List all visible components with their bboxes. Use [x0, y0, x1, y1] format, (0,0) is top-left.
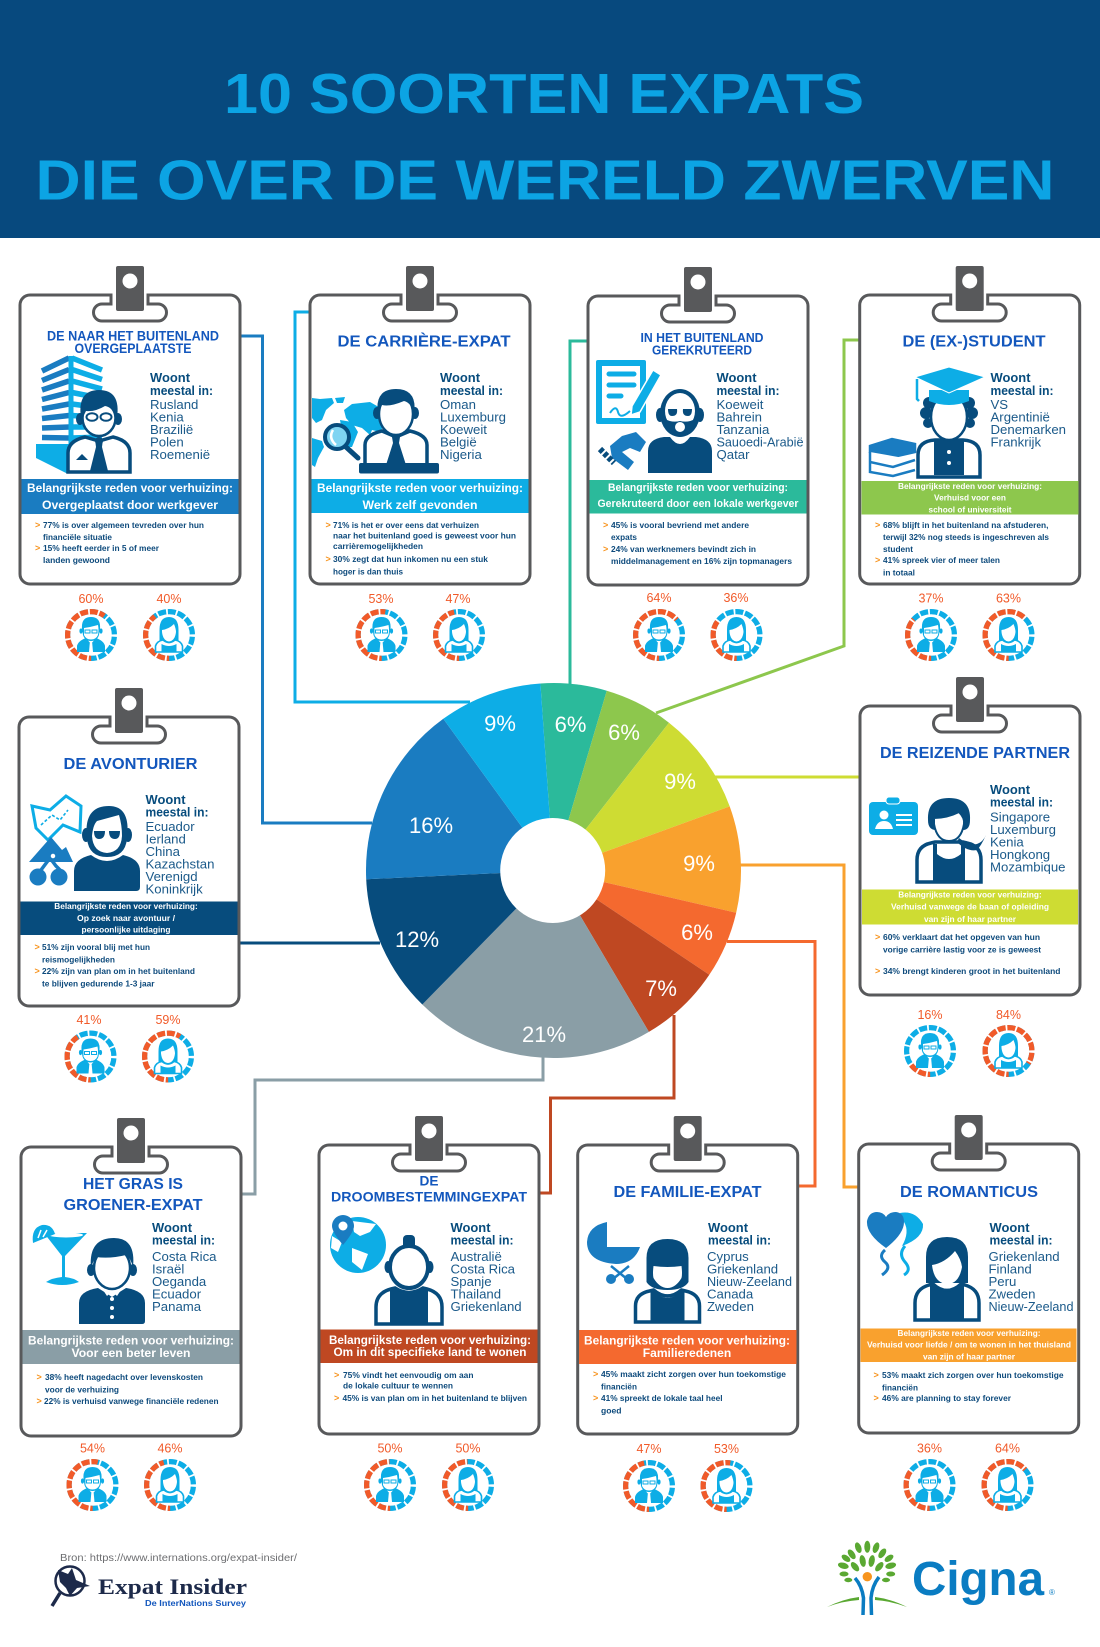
pie chart: 9%: [664, 769, 696, 794]
reason band: Belangrijkste reden voor verhuizing:: [28, 1334, 234, 1348]
woont meestal in: [716, 370, 804, 462]
woont meestal in: Qatar: [716, 447, 750, 462]
bullets: 51% zijn vooral blij met hun: [42, 943, 150, 952]
woont meestal in: Koeweit: [440, 422, 487, 437]
woont meestal in: meestal in:: [708, 1232, 771, 1248]
woont meestal in: Ierland: [146, 832, 186, 846]
reason band: Verhuisd voor liefde / om te wonen in het thuisland: [867, 1340, 1071, 1350]
reason band: Belangrijkste reden voor verhuizing:: [584, 1334, 790, 1348]
icon: cocktail glass: [33, 1225, 87, 1285]
title: DE AVONTURIER: [64, 756, 198, 773]
gender split card 7: [69, 1442, 193, 1508]
woont meestal in: China: [146, 844, 181, 859]
reason band: Belangrijkste reden voor verhuizing:: [27, 481, 233, 495]
gender split card 6: 84%: [996, 1008, 1021, 1022]
bullets: hoger is dan thuis: [333, 568, 404, 576]
woont meestal in: Woont: [708, 1220, 749, 1235]
icon: globe with location pin: [330, 1215, 386, 1273]
bullets: >: [593, 1393, 598, 1403]
gender split card 10: 64%: [995, 1442, 1020, 1456]
woont meestal in: Woont: [152, 1220, 193, 1235]
bullets: >: [35, 543, 40, 553]
title: DE (EX-)STUDENT: [902, 334, 1046, 350]
reason band: Werk zelf gevonden: [362, 498, 478, 512]
woont meestal in: Tanzania: [716, 422, 770, 437]
icon: man with shirt: [79, 1238, 145, 1324]
title: DROOMBESTEMMINGEXPAT: [331, 1188, 527, 1204]
title: DE NAAR HET BUITENLAND: [47, 328, 219, 344]
bullets: >: [875, 555, 880, 565]
icon: student with mortarboard: [915, 367, 985, 477]
woont meestal in: Mozambique: [990, 860, 1066, 874]
woont meestal in: Panama: [152, 1299, 202, 1314]
card 4: ex-student: [860, 266, 1080, 584]
title: DE REIZENDE PARTNER: [880, 745, 1070, 762]
reason band: [860, 1328, 1076, 1362]
bullets: 45% is van plan om in het buitenland te blijven: [342, 1394, 527, 1403]
bullets: te blijven gedurende 1-3 jaar: [42, 980, 154, 988]
bullets: >: [875, 932, 880, 942]
reason band: Belangrijkste reden voor verhuizing:: [317, 481, 523, 495]
woont meestal in: meestal in:: [152, 1232, 215, 1248]
bullets: 22% zijn van plan om in het buitenland: [42, 967, 195, 976]
gender split card 1: 60%: [78, 592, 104, 606]
pie chart: 16%: [409, 813, 453, 838]
bullets: goed: [601, 1406, 622, 1416]
title: OVERGEPLAATSTE: [74, 340, 192, 356]
bullets: >: [874, 1370, 879, 1380]
reason band: [862, 890, 1078, 924]
title: DE FAMILIE-EXPAT: [614, 1184, 762, 1201]
woont meestal in: Woont: [990, 1220, 1030, 1235]
bullets: >: [593, 1369, 598, 1379]
woont meestal in: Kazachstan: [146, 856, 214, 872]
bullets: reismogelijkheden: [42, 956, 115, 964]
bullets: >: [35, 520, 40, 530]
icon: woman with long hair: [636, 1239, 700, 1322]
woont meestal in: Rusland: [150, 397, 198, 412]
icon: contract and handshake: [596, 360, 661, 470]
woont meestal in: [150, 370, 213, 462]
bullets: middelmanagement en 16% zijn topmanagers: [611, 557, 793, 566]
title: GEREKRUTEERD: [652, 344, 752, 358]
logo: Expat Insider: De InterNations Survey: [145, 1598, 246, 1608]
gender split card 7: 46%: [157, 1442, 183, 1456]
woont meestal in: Peru: [988, 1274, 1016, 1289]
woont meestal in: Luxemburg: [990, 822, 1056, 837]
woont meestal in: Frankrijk: [990, 434, 1041, 450]
bullets: >: [603, 544, 608, 554]
reason band: [862, 481, 1078, 514]
woont meestal in: Griekenland: [450, 1299, 522, 1314]
icon: world map with magnifier: [312, 397, 384, 467]
gender split card 9: 53%: [714, 1442, 739, 1456]
woont meestal in: Woont: [716, 370, 757, 385]
bullets: student: [883, 545, 913, 554]
bullets: >: [334, 1370, 339, 1380]
woont meestal in: [988, 1220, 1074, 1314]
gender split card 9: [626, 1442, 750, 1509]
gender split card 8: [367, 1442, 491, 1508]
bullets: [326, 520, 516, 576]
bullets: 41% spreek vier of meer talen: [883, 556, 1000, 565]
title: [331, 1172, 527, 1204]
woont meestal in: VS: [990, 397, 1008, 412]
woont meestal in: Costa Rica: [152, 1249, 217, 1264]
gender split card 5: [67, 1013, 191, 1080]
woont meestal in: Nieuw-Zeeland: [988, 1299, 1074, 1314]
title: [640, 331, 764, 358]
reason band: [579, 1330, 796, 1364]
icon: ID badge: [869, 797, 918, 835]
card 2: carriere-expat: [310, 266, 530, 584]
bullets: [875, 932, 1061, 976]
bullets: 45% is vooral bevriend met andere: [611, 521, 750, 530]
woont meestal in: Kenia: [150, 410, 184, 424]
woont meestal in: [146, 792, 214, 896]
gender split card 7: 54%: [80, 1442, 105, 1456]
woont meestal in: Spanje: [450, 1274, 492, 1289]
woont meestal in: Luxemburg: [440, 410, 506, 424]
bullets: >: [36, 1396, 42, 1406]
logo: Expat Insider: Expat Insider: [98, 1574, 247, 1599]
woont meestal in: Hongkong: [990, 847, 1050, 862]
bullets: [36, 1372, 219, 1406]
woont meestal in: Koeweit: [716, 397, 764, 412]
gender split card 8: 50%: [455, 1442, 481, 1456]
bullets: >: [326, 520, 331, 530]
woont meestal in: Griekenland: [988, 1249, 1060, 1264]
reason band: persoonlijke uitdaging: [82, 924, 170, 934]
bullets: voor de verhuizing: [45, 1386, 119, 1394]
pie chart: 21%: [522, 1022, 566, 1047]
title: [64, 1176, 203, 1214]
woont meestal in: Kenia: [990, 834, 1024, 850]
pie chart: 6%: [681, 920, 713, 945]
woont meestal in: meestal in:: [440, 383, 503, 398]
card 7: gras is groener: [21, 1118, 241, 1436]
reason band: Belangrijkste reden voor verhuizing:: [329, 1333, 531, 1347]
woont meestal in: Oman: [440, 397, 476, 412]
bullets: >: [603, 520, 608, 530]
title: DE: [420, 1172, 438, 1188]
reason band: [22, 479, 238, 514]
bullets: 46% are planning to stay forever: [882, 1394, 1011, 1403]
bullets: 60% verklaart dat het opgeven van hun: [883, 933, 1040, 942]
woont meestal in: Singapore: [990, 810, 1050, 824]
gender split card 8: 50%: [377, 1442, 403, 1456]
bullets: 38% heeft nagedacht over levenskosten: [45, 1373, 203, 1382]
bullets: >: [34, 966, 40, 976]
card 1: overgeplaatste: [20, 266, 240, 584]
icon: heart balloons: [867, 1212, 923, 1275]
bullets: 71% is het er over eens dat verhuizen: [333, 521, 479, 530]
woont meestal in: Canada: [707, 1286, 754, 1302]
gender split card 2: 53%: [368, 592, 394, 606]
woont meestal in: Sauoedi-Arabië: [716, 434, 804, 450]
reason band: Verhuisd vanwege de baan of opleiding: [891, 902, 1049, 912]
gender split card 2: [358, 592, 482, 658]
bullets: naar het buitenland goed is geweest voor hun: [333, 532, 516, 540]
bullets: financiële situatie: [43, 533, 113, 542]
bullets: 77% is over algemeen tevreden over hun: [43, 521, 204, 530]
reason band: Belangrijkste reden voor verhuizing:: [898, 1328, 1041, 1338]
woont meestal in: Roemenië: [150, 447, 210, 462]
bullets: de lokale cultuur te wennen: [343, 1382, 453, 1390]
title: HET GRAS IS: [83, 1176, 183, 1193]
pie chart: [366, 683, 741, 1058]
woont meestal in: Polen: [150, 434, 184, 450]
card 6: reizende partner: [860, 677, 1080, 995]
bullets: >: [36, 1372, 42, 1382]
gender split card 5: 59%: [155, 1013, 181, 1027]
woont meestal in: Ecuador: [146, 819, 195, 834]
icon: map, mountain and cyclist: [29, 796, 81, 886]
woont meestal in: Woont: [450, 1220, 491, 1235]
pie chart: 6%: [608, 720, 640, 745]
title: [47, 328, 219, 356]
gender split card 3: [636, 591, 760, 658]
bullets: in totaal: [883, 568, 915, 578]
bullets: 68% blijft in het buitenland na afstuderen,: [883, 521, 1048, 530]
gender split card 4: [908, 592, 1032, 658]
icon: man at desk: [359, 389, 439, 474]
woont meestal in: Woont: [990, 370, 1031, 385]
card 10: romanticus: [859, 1115, 1079, 1433]
source line: Bron: https://www.internations.org/expat-insider/: [60, 1553, 297, 1564]
bullets: 75% vindt het eenvoudig om aan: [343, 1371, 474, 1380]
gender split card 6: [907, 1008, 1032, 1074]
card 8: droombestemming: [319, 1116, 539, 1434]
woont meestal in: meestal in:: [450, 1232, 514, 1248]
reason band: [320, 1330, 538, 1363]
woont meestal in: meestal in:: [716, 383, 780, 398]
woont meestal in: meestal in:: [990, 794, 1053, 810]
woont meestal in: meestal in:: [146, 804, 208, 820]
reason band: Op zoek naar avontuur /: [77, 913, 176, 923]
woont meestal in: Woont: [150, 370, 191, 385]
woont meestal in: meestal in:: [990, 1232, 1052, 1248]
bullets: 41% spreekt de lokale taal heel: [601, 1394, 722, 1403]
pie chart: 7%: [645, 976, 677, 1001]
pie chart: 9%: [683, 851, 715, 876]
woont meestal in: Koninkrijk: [146, 882, 203, 896]
woont meestal in: Woont: [990, 782, 1031, 797]
bullets: 34% brengt kinderen groot in het buitenland: [883, 967, 1061, 976]
reason band: van zijn of haar partner: [923, 1352, 1016, 1362]
icon: man with glasses and tie: [68, 390, 130, 472]
reason band: Belangrijkste reden voor verhuizing:: [54, 901, 198, 911]
woont meestal in: [450, 1220, 522, 1314]
woont meestal in: Nieuw-Zeeland: [707, 1274, 792, 1289]
woont meestal in: Australië: [450, 1249, 502, 1264]
woont meestal in: Bahrein: [716, 410, 762, 424]
bullets: [593, 1369, 787, 1416]
woont meestal in: [152, 1220, 217, 1314]
woont meestal in: meestal in:: [990, 383, 1054, 398]
woont meestal in: Zweden: [707, 1299, 754, 1314]
title: DE ROMANTICUS: [900, 1184, 1038, 1201]
woont meestal in: [440, 370, 506, 462]
woont meestal in: België: [440, 434, 477, 450]
bullets: expats: [611, 533, 638, 542]
bullets: 24% van werknemers bevindt zich in: [611, 545, 756, 554]
woont meestal in: [990, 782, 1066, 874]
pie chart: 12%: [395, 927, 439, 952]
reason band: Familieredenen: [643, 1346, 731, 1360]
woont meestal in: Costa Rica: [450, 1262, 516, 1276]
reason band: van zijn of haar partner: [924, 914, 1017, 924]
logo: Cigna: ®: [1049, 1588, 1055, 1597]
bullets: >: [334, 1393, 339, 1403]
reason band: Belangrijkste reden voor verhuizing:: [898, 481, 1042, 491]
bullets: [875, 520, 1050, 578]
woont meestal in: Thailand: [450, 1286, 501, 1302]
gender split card 1: [68, 592, 192, 658]
bullets: [35, 520, 204, 565]
bullets: 22% is verhuisd vanwege financiële redenen: [44, 1397, 219, 1406]
bullets: financiën: [882, 1384, 918, 1392]
woont meestal in: Brazilië: [150, 422, 193, 437]
logo: Cigna: [827, 1541, 1055, 1615]
bullets: 15% heeft eerder in 5 of meer: [43, 544, 159, 553]
woont meestal in: Argentinië: [990, 410, 1050, 424]
bullets: [34, 942, 195, 988]
pie chart: 6%: [555, 712, 586, 737]
woont meestal in: Nigeria: [440, 447, 482, 462]
reason band: Gerekruteerd door een lokale werkgever: [598, 498, 799, 510]
bullets: 45% maakt zicht zorgen over hun toekomstige: [601, 1370, 787, 1379]
pie chart: 9%: [484, 711, 516, 736]
woont meestal in: Woont: [146, 792, 186, 807]
reason band: Om in dit specifieke land te wonen: [334, 1345, 526, 1359]
icon: woman with fringe: [915, 1237, 979, 1320]
bullets: [874, 1370, 1064, 1403]
bullets: [603, 520, 793, 566]
woont meestal in: Oeganda: [152, 1274, 207, 1289]
title: DE CARRIÈRE-EXPAT: [338, 334, 511, 350]
bullets: [334, 1370, 527, 1403]
icon: person with top knot: [376, 1235, 442, 1324]
icon: woman with scarf: [917, 798, 986, 882]
card 9: familie-expat: [578, 1116, 798, 1434]
gender split card 10: 36%: [917, 1442, 942, 1456]
woont meestal in: Verenigd: [146, 869, 198, 884]
header banner: 10 SOORTEN EXPATS: [224, 62, 864, 126]
woont meestal in: meestal in:: [150, 383, 213, 398]
reason band: [590, 480, 806, 514]
woont meestal in: Cyprus: [707, 1249, 749, 1264]
header banner: DIE OVER DE WERELD ZWERVEN: [36, 148, 1054, 212]
logo: Expat Insider: [52, 1566, 247, 1608]
card 3: gerekruteerd: [588, 267, 808, 585]
reason band: Belangrijkste reden voor verhuizing:: [898, 890, 1042, 900]
logo: Cigna: Cigna: [912, 1553, 1044, 1606]
bullets: terwijl 32% nog steeds is ingeschreven als: [883, 533, 1050, 542]
bullets: 53% maakt zich zorgen over hun toekomstige: [882, 1371, 1064, 1380]
reason band: Belangrijkste reden voor verhuizing:: [608, 482, 788, 494]
woont meestal in: Woont: [440, 370, 481, 385]
woont meestal in: Israël: [152, 1262, 184, 1276]
header banner: [0, 0, 1100, 238]
woont meestal in: Ecuador: [152, 1286, 202, 1302]
reason band: [20, 901, 238, 935]
bullets: >: [875, 520, 880, 530]
icon: books: [870, 439, 915, 476]
bullets: landen gewoond: [43, 556, 110, 565]
title: GROENER-EXPAT: [64, 1197, 203, 1214]
gender split card 10: [906, 1442, 1031, 1508]
reason band: [22, 1330, 240, 1364]
title: IN HET BUITENLAND: [640, 331, 764, 345]
bullets: vorige carrière lastig voor ze is geweest: [883, 946, 1041, 954]
gender split card 4: 37%: [918, 592, 944, 606]
woont meestal in: [707, 1220, 792, 1314]
icon: bearded man with sunglasses: [648, 389, 712, 473]
icon: office building: [36, 356, 102, 473]
bullets: carrièremogelijkheden: [333, 542, 423, 551]
gender split card 9: 47%: [636, 1442, 662, 1456]
woont meestal in: Zweden: [988, 1286, 1035, 1302]
icon: baby pram: [587, 1222, 640, 1284]
bullets: >: [34, 942, 40, 952]
reason band: [312, 479, 528, 513]
gender split card 3: 64%: [646, 591, 672, 605]
reason band: Voor een beter leven: [72, 1346, 190, 1360]
bullets: >: [875, 966, 880, 976]
bullets: >: [326, 554, 331, 564]
bullets: financiën: [601, 1382, 637, 1392]
gender split card 5: 41%: [76, 1013, 102, 1027]
woont meestal in: Griekenland: [707, 1262, 778, 1276]
gender split card 4: 63%: [996, 592, 1021, 606]
gender split card 1: 40%: [156, 592, 182, 606]
bullets: >: [874, 1393, 879, 1403]
icon: man with sunglasses: [74, 806, 140, 891]
card 5: avonturier: [19, 688, 239, 1006]
woont meestal in: [990, 370, 1066, 450]
woont meestal in: Denemarken: [990, 422, 1066, 437]
woont meestal in: Finland: [988, 1262, 1032, 1276]
gender split card 3: 36%: [723, 591, 749, 605]
reason band: Overgeplaatst door werkgever: [42, 498, 218, 512]
gender split card 6: 16%: [917, 1008, 943, 1022]
reason band: Verhuisd voor een: [934, 492, 1006, 502]
connector lines from pie to cards: [239, 312, 860, 1194]
reason band: school of universiteit: [928, 504, 1012, 514]
bullets: 30% zegt dat hun inkomen nu een stuk: [333, 555, 489, 564]
gender split card 2: 47%: [445, 592, 471, 606]
